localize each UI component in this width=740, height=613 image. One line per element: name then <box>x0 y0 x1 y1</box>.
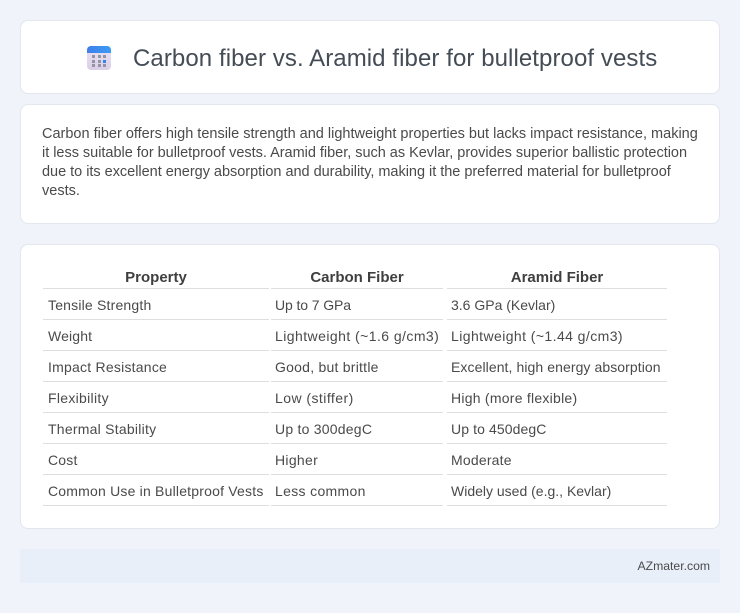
row: common use: Less common <box>275 483 366 499</box>
row: cost: Cost <box>48 452 78 468</box>
panel: summary text <box>20 104 720 224</box>
footer bar <box>20 549 720 583</box>
row: common use <box>48 483 611 499</box>
row: cost: Higher <box>275 452 318 468</box>
row: thermal stability <box>48 421 546 437</box>
row: weight: Weight <box>48 328 92 344</box>
row: flexibility: Flexibility <box>48 390 109 406</box>
footer credit: AZmater.com <box>638 559 710 573</box>
table header: Aramid Fiber <box>511 269 603 286</box>
row: cost <box>48 452 512 468</box>
row: weight: Lightweight (~1.44 g/cm3) <box>451 328 623 344</box>
row: common use: Common Use in Bulletproof Vests <box>48 483 264 499</box>
summary paragraph: vests. <box>42 183 80 199</box>
row: impact resistance: Impact Resistance <box>48 359 167 375</box>
row: flexibility <box>48 390 577 406</box>
row: tensile strength: Tensile Strength <box>48 297 151 313</box>
summary paragraph: it less suitable for bulletproof vests. Aramid fiber, such as Kevlar, provides superior ballistic protection <box>42 145 687 161</box>
row: impact resistance: Good, but brittle <box>275 359 379 375</box>
row: common use: Widely used (e.g., Kevlar) <box>451 483 611 499</box>
row: impact resistance: Excellent, high energy absorption <box>451 359 661 375</box>
row: tensile strength: Up to 7 GPa <box>275 297 351 313</box>
row: weight <box>48 328 623 344</box>
row: cost: Moderate <box>451 452 512 468</box>
row: flexibility: High (more flexible) <box>451 390 577 406</box>
row: weight: Lightweight (~1.6 g/cm3) <box>275 328 439 344</box>
row: flexibility: Low (stiffer) <box>275 390 354 406</box>
comparison table <box>43 269 667 506</box>
summary paragraph: Carbon fiber offers high tensile strength and lightweight properties but lacks impact resistance, making <box>42 126 698 142</box>
summary paragraph <box>42 126 698 199</box>
summary paragraph: due to its excellent energy absorption and durability, making it the preferred material for bulletproof <box>42 164 671 180</box>
row: tensile strength: 3.6 GPa (Kevlar) <box>451 297 555 313</box>
row: thermal stability: Up to 450degC <box>451 421 546 437</box>
panel: comparison table <box>20 244 720 529</box>
row: thermal stability: Thermal Stability <box>48 421 156 437</box>
panel: title card <box>20 20 720 94</box>
table header <box>125 269 603 286</box>
row: impact resistance <box>48 359 661 375</box>
row: tensile strength <box>48 297 555 313</box>
icon: calendar <box>87 46 111 70</box>
table header: Carbon Fiber <box>310 269 404 286</box>
row: thermal stability: Up to 300degC <box>275 421 372 437</box>
title: Carbon fiber vs. Aramid fiber for bulletproof vests <box>133 45 657 72</box>
table header: Property <box>125 269 187 286</box>
